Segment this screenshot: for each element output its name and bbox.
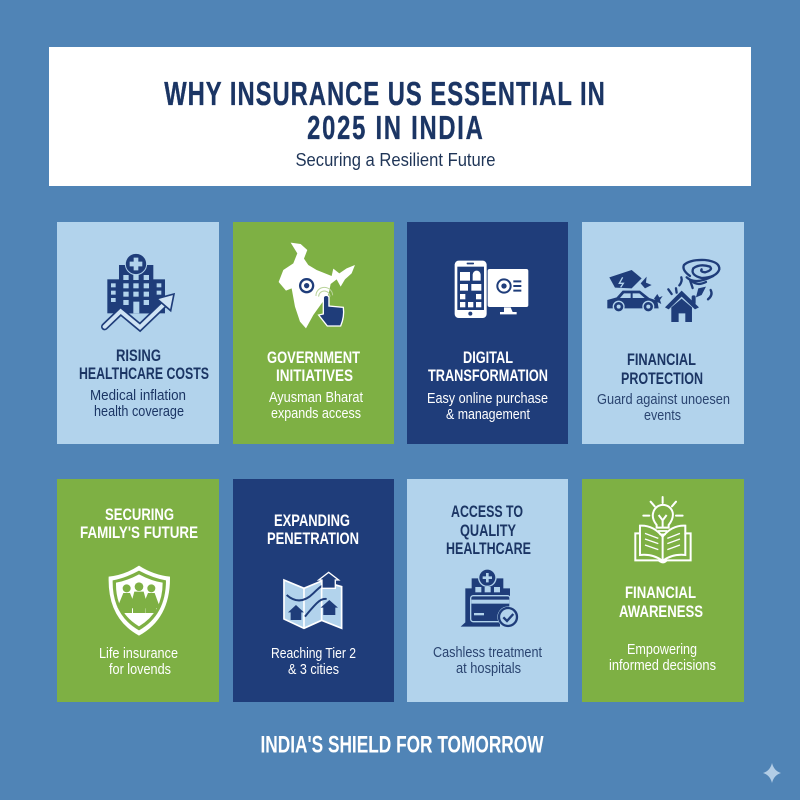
description: Ayusman Bharat (269, 390, 363, 406)
icon: sparkle (763, 763, 781, 783)
heading: RISING (116, 347, 161, 365)
description: Reaching Tier 2 (271, 646, 356, 662)
description: & management (446, 407, 530, 423)
heading (621, 351, 703, 388)
description: Cashless treatment (433, 645, 542, 661)
description (609, 642, 716, 674)
heading (80, 506, 198, 542)
icon: phone and monitor (455, 261, 528, 318)
heading (446, 503, 531, 558)
heading: FINANCIAL (625, 584, 696, 602)
panel: digital transformation (407, 222, 568, 444)
description: for lovends (109, 662, 171, 678)
heading: HEALTHCARE (446, 540, 531, 558)
heading: DIGITAL (463, 349, 513, 367)
description (271, 646, 356, 678)
description (597, 392, 730, 424)
heading (79, 347, 209, 383)
heading: FAMILY'S FUTURE (80, 524, 198, 542)
subtitle: Securing a Resilient Future (296, 149, 496, 170)
panel: access to quality healthcare (407, 479, 568, 702)
header panel (49, 47, 751, 186)
heading: GOVERNMENT (267, 349, 360, 367)
panel: government initiatives (233, 222, 394, 444)
icon: car crash, house and tornado (607, 260, 719, 322)
heading: QUALITY (460, 522, 516, 540)
description (90, 388, 186, 420)
description: health coverage (94, 404, 184, 420)
icon: hospital card with check (461, 569, 519, 628)
heading (428, 349, 548, 385)
heading: TRANSFORMATION (428, 367, 548, 385)
description: & 3 cities (288, 662, 339, 678)
heading: INITIATIVES (276, 367, 353, 385)
description: Guard against unoesen (597, 392, 730, 408)
heading (267, 512, 359, 548)
panel: securing family's future (57, 479, 219, 702)
panel: expanding penetration (233, 479, 394, 702)
footer tagline: INDIA'S SHIELD FOR TOMORROW (260, 732, 544, 758)
heading (267, 349, 360, 385)
title: WHY INSURANCE US ESSENTIAL IN (164, 76, 605, 113)
panel: rising healthcare costs (57, 222, 219, 444)
description: events (644, 408, 681, 424)
heading: PROTECTION (621, 370, 703, 388)
title: 2025 IN INDIA (307, 110, 483, 147)
icon: hospital with rising arrow (105, 253, 174, 327)
description (99, 646, 178, 678)
description: informed decisions (609, 658, 716, 674)
description (433, 645, 542, 677)
heading: EXPANDING (274, 512, 350, 530)
description (269, 390, 363, 422)
icon: map with houses (284, 572, 342, 628)
description: Empowering (627, 642, 697, 658)
title (164, 76, 605, 147)
description: at hospitals (456, 661, 521, 677)
description: Life insurance (99, 646, 178, 662)
heading: FINANCIAL (627, 351, 696, 369)
panel: financial awareness (582, 479, 744, 702)
icon: light bulb and open book (635, 497, 691, 562)
heading: HEALTHCARE COSTS (79, 365, 209, 383)
heading: ACCESS TO (451, 503, 523, 521)
heading: AWARENESS (619, 603, 703, 621)
description (427, 391, 548, 423)
description: expands access (271, 406, 361, 422)
heading (619, 584, 703, 621)
icon: india map with pointer (279, 243, 355, 328)
description: Easy online purchase (427, 391, 548, 407)
icon: family shield (109, 566, 170, 636)
description: Medical inflation (90, 388, 186, 404)
heading: SECURING (105, 506, 174, 524)
heading: PENETRATION (267, 530, 359, 548)
panel: financial protection (582, 222, 744, 444)
